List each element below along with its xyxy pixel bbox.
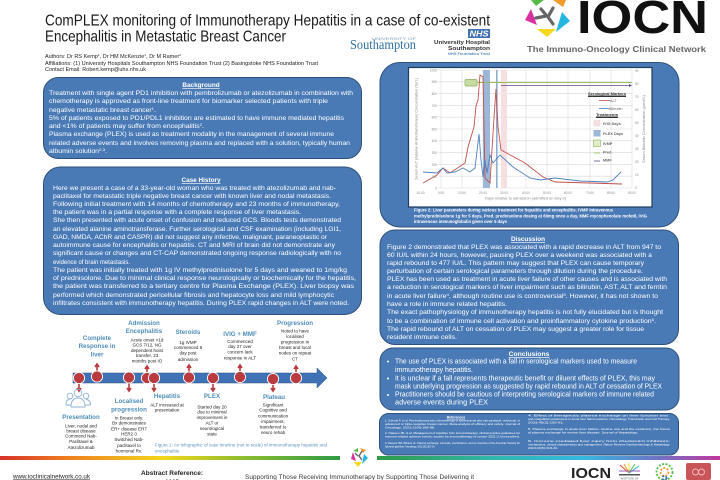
chart legend (588, 92, 626, 162)
footer: abstract reference (141, 470, 203, 480)
right axis labels: 80 (635, 82, 639, 86)
panel: background (44, 78, 362, 158)
footer logo: rainbow (619, 463, 640, 480)
chart legend: MMF (603, 158, 612, 162)
references right column: 6. Immune-mediated liver injury from checkpoint inhibitors: (528, 440, 671, 443)
event: localised progression: HER2 0 (121, 432, 137, 436)
references heading: References (447, 416, 465, 420)
x axis labels: 60.00 (564, 191, 572, 195)
event: localised progression: Bx demonstrates (112, 420, 147, 426)
event: steroids: commenced 8 (174, 345, 203, 350)
conclusions bullets (387, 358, 662, 406)
logo: University Hospital Southampton NHS (434, 29, 491, 56)
x axis labels: 40.00 (522, 191, 530, 195)
event: plateau: communication (258, 414, 289, 418)
discussion text: The rapid rebound of ALT on cessation of PLEX may suggest a greater role for tissue (387, 326, 644, 333)
event: IVIG and MMF: concern lack (227, 350, 253, 354)
references right column: 2023;20(5):319-34. (528, 447, 558, 450)
event: plateau: Plateau (263, 394, 285, 401)
discussion text: to be a combination of immune cell activation and proinflammatory cytokine production 6. (387, 316, 656, 325)
event: PLEX: PLEX (204, 393, 221, 400)
left axis title: Serum ALT (Alanine Aminotransferase) Concentration (IU/L) (414, 78, 418, 180)
left axis labels: 0 (435, 186, 437, 190)
event: hepatitis: presentation (155, 408, 180, 412)
background text: 5% of patients exposed to PD1/PDL1 inhibition are estimated to have immune mediated hepatitis (49, 115, 344, 122)
x axis labels: -10.00 (415, 191, 425, 195)
event: hepatitis: ALT increased at (150, 402, 185, 408)
panel: references (380, 414, 678, 455)
event: plateau: Significant (263, 402, 284, 408)
event: hepatitis: Hepatitis (154, 393, 181, 400)
logo: University of Southampton: Southampton (350, 37, 416, 52)
event: progression: progression in (281, 340, 310, 344)
references left column: Oncology. 2023;12(4):188-98. (385, 426, 435, 430)
left axis labels: 300 (432, 151, 437, 155)
event: admission encephalitis: Admission (128, 320, 160, 327)
background text: Plasma exchange (PLEX) is used as treatment modality in the management of several immune (49, 131, 334, 138)
panel: discussion (380, 230, 678, 344)
left axis labels: 700 (432, 104, 437, 108)
chart legend: Treatments (596, 113, 618, 117)
event: presentation: Paclitaxel & (69, 439, 93, 444)
case history text: GAD, NMDA, AChR and CASPR) did not suggest any infective, malignant, paraneoplastic or (53, 234, 328, 241)
event: complete response: liver (91, 352, 104, 358)
event: progression: breast and local (279, 345, 311, 350)
figure 2 caption (414, 208, 648, 224)
footer: abstract reference: Abstract Reference: (141, 470, 203, 477)
event: presentation: Presentation (62, 414, 100, 421)
references left column: 1. Schmid P, et al. Pembrolizumab plus chemotherapy or atezolizumab plus nab-paclitaxel, nivolumab, in (385, 420, 521, 422)
chart legend: ALT (610, 99, 617, 103)
event: progression: Progression (277, 320, 313, 327)
event: progression: CT (292, 356, 298, 362)
right axis title: Serum Bilirubin Concentration (µmol/L) (642, 95, 646, 163)
references right column: and coagulation parameters in acute liver failure patients. Hematology, Transfusion and Cell Therapy. (528, 418, 670, 421)
chart legend: Bilirubin (609, 107, 623, 111)
background text: negative metastatic breast cancer 1. (49, 106, 156, 114)
x axis labels: 50.00 (543, 191, 551, 195)
event: admission encephalitis: GCS 7/12, NG (132, 342, 162, 348)
event: presentation (62, 414, 100, 450)
event: PLEX: state (207, 432, 217, 436)
panel: case history (44, 167, 362, 314)
discussion text: The exact pathophysiology of immunotherapy hepatitis is not fully elucidated but is thought (387, 309, 663, 316)
conclusions bullets: It is unclear if a fall represents therapeutic benefit or diluent effects of PLEX, this may (395, 376, 655, 382)
figure 1 caption: encephalitis (155, 448, 180, 454)
event: localised progression: Localised (115, 398, 143, 405)
authors and affiliations: Authors: Dr RS Kemp 1, Dr HM McKenzie 1, Dr M Ramer 2 (45, 53, 181, 60)
logo: University Hospital Southampton NHS: NHS (470, 30, 489, 38)
x axis labels: 10.00 (458, 191, 466, 195)
x axis labels: 70.00 (586, 191, 594, 195)
references left column: advanced or triple-negative breast cancer. Meta-analysis of efficacy and safety. Journal of (385, 423, 520, 426)
case history text: significant cause or changes and CT-CAP demonstrated ongoing response radiologically with no (53, 250, 341, 257)
right axis labels: 30 (635, 147, 639, 151)
right axis labels: 90 (635, 69, 639, 73)
references left column (385, 420, 521, 448)
event: plateau: transferred to (260, 424, 287, 430)
case history text: the patient was transferred to a tertiary centre for Plasma Exchange (PLEX). Liver biopsy was (53, 283, 354, 290)
case history text: of prednisolone. Due to minimal clinical response neurologically or biochemically for the hepatitis, (53, 275, 356, 282)
event: IVIG and MMF (223, 331, 257, 360)
event: presentation: Commend Nab- (65, 434, 97, 438)
case history text: an elevated alanine aminotransferase. Further serological and CSF examination (including LGI1, (53, 226, 341, 233)
event: progression: localised (286, 334, 304, 339)
event: localised progression (111, 398, 147, 454)
left axis labels: 600 (432, 116, 437, 120)
discussion text: in acute liver failure 4, although routine use is controversial 5. However, it has not shown to (387, 292, 658, 300)
case history text: Here we present a case of a 33-year-old woman who was treated with atezolizumab and nab- (53, 185, 336, 192)
logo tagline: The Immuno-Oncology Clinical Network (527, 44, 706, 54)
title: ComPLEX monitoring of Immunotherapy Hepatitis in a case of co-existent (45, 12, 490, 30)
event: PLEX: improvement in (197, 415, 228, 420)
event: localised progression: hormonal Rx. (116, 448, 142, 454)
logo: University Hospital Southampton NHS: NHS Foundation Trust (448, 52, 491, 56)
right axis labels: 0 (635, 186, 637, 190)
left axis labels: 100 (432, 175, 437, 179)
references left column: 2. Haanen JB, et al. Management of toxicities from immunotherapy: clinical practice guidelines for (385, 432, 520, 435)
event: IVIG and MMF: day 27 over (228, 344, 252, 349)
discussion heading: Discussion (511, 236, 545, 243)
background heading: Background (182, 82, 220, 89)
discussion text: PLEX has been used as treatment in acute liver failure of other causes and is associated with (387, 276, 667, 283)
references right column (528, 414, 671, 450)
right axis labels: 40 (635, 134, 639, 138)
figure 1 caption: Figure 1: An infographic of case timeline (not to scale) of immunotherapy hepatitis and (155, 442, 327, 448)
chart legend: Serological Markers (588, 92, 626, 96)
conclusions bullets: Practitioners should be cautious of interpreting serological markers of immune related (395, 392, 654, 398)
right axis labels: 20 (635, 160, 639, 164)
right axis labels: 70 (635, 95, 639, 99)
logo: University of Southampton: UNIVERSITY OF (372, 37, 416, 41)
event: localised progression: Switched Nab- (114, 437, 144, 442)
icon: people (66, 389, 90, 407)
case history heading: Case History (181, 177, 221, 184)
event: localised progression: ER+ disease ER7 (111, 426, 147, 432)
event: progression (277, 320, 313, 362)
authors and affiliations: Affiliations: (1) University Hospitals Southampton NHS Foundation Trust (2) Basingstoke NHS Foundation Trust (45, 61, 319, 67)
event: IVIG and MMF: IVIG + MMF (223, 331, 257, 338)
chart legend: IVMP (603, 142, 613, 146)
discussion text: rapid rebound to 477 IU/L. This pattern may suggest that PLEX can cause temporary (387, 260, 645, 267)
event: PLEX: ALT or (205, 420, 219, 426)
event: hepatitis (150, 393, 185, 412)
event: progression: Noted to have (281, 328, 310, 334)
event: presentation: Atezolizumab (67, 445, 95, 450)
figure 2 caption: Figure 2: Liver parameters during various treatment for hepatitis and encephalitis. IVMP intravenous (414, 208, 614, 212)
event: PLEX: Started day 20 (197, 404, 227, 410)
left axis labels: 400 (432, 139, 437, 143)
event: complete response: Response in (79, 343, 116, 350)
references left column: 3. Reeves HM, Winters JL. Plasma exchange: concepts, mechanisms, and an overview of the American Society for (385, 442, 520, 445)
event: plateau (258, 394, 289, 435)
event: steroids: admission (178, 357, 199, 362)
figure 1 caption (155, 442, 327, 454)
event: IVIG and MMF: Commenced (227, 339, 253, 344)
event: admission encephalitis: transfer, 23 (136, 353, 159, 358)
event: plateau: Cognitive and (259, 408, 287, 412)
logo: University Hospital Southampton NHS: Southampton (448, 46, 490, 52)
right axis labels (635, 69, 639, 190)
references left column: immune-related adverse events: society for immunotherapy of cancer 2021 (J Immunother). (385, 436, 520, 438)
logo: University Hospital Southampton NHS: University Hospital (434, 40, 491, 46)
background text: and <1% of patients may suffer from encephalitis 2. (49, 122, 204, 130)
panel: figure 2 (380, 62, 679, 227)
left axis labels: 200 (432, 163, 437, 167)
event: plateau: impairment, (261, 419, 285, 424)
title (45, 12, 490, 46)
event: presentation: Liver, nodal and (65, 424, 97, 428)
panel: conclusions (380, 348, 679, 410)
references left column: Apheresis guidelines. Hematology. 2012;2012:617-24. (385, 446, 435, 448)
event: admission encephalitis: Acute onset <1d (131, 338, 164, 342)
x axis labels: 20.00 (479, 191, 487, 195)
case history text: autoimmune cause for encephalitis or hepatitis. CT and MRI of brain did not demonstrate any (53, 242, 336, 249)
footer logo: ring of dots (656, 464, 672, 480)
left axis labels: 800 (432, 92, 437, 96)
case history text: She then presented with acute onset of confusion and reduced GCS. Bloods tests demonstrated (53, 217, 341, 224)
discussion text (387, 244, 667, 341)
chart legend: PLEX Days (603, 132, 623, 136)
x axis labels: 90.00 (628, 191, 636, 195)
case history text: evidence of brain metastasis. (53, 259, 130, 266)
case history text: the patient was in a partial response with a complete response of liver metastasis. (53, 209, 301, 216)
references right column: 5. Plasma exchange in acute liver failure: routine use and the evidence, the future (528, 428, 671, 431)
references right column: 4. Effect of therapeutic plasma exchange on liver function test (528, 414, 669, 418)
conclusions bullets: adverse events during PLEX (395, 400, 488, 406)
background text: albumin solution 2,3. (49, 146, 107, 155)
authors and affiliations: Contact Email: Robert.kemp@uhs.nhs.uk (45, 67, 147, 73)
case history text (53, 185, 356, 307)
x axis labels: 30.00 (500, 191, 508, 195)
logo: IOCN star (525, 0, 570, 37)
event: admission encephalitis (126, 320, 164, 364)
right axis labels: 50 (635, 121, 639, 125)
background text: Treatment with single agent PD1 inhibition with pembrolizumab or atezolizumab in combination with (49, 90, 353, 97)
timeline infographic (62, 320, 327, 454)
discussion text: perturbation of certain serological parameters through dilution during the procedure. (387, 268, 643, 275)
x axis labels (415, 191, 636, 195)
event: steroids: Steroids (176, 329, 201, 336)
background text (49, 90, 353, 155)
title: Encephalitis in Metastatic Breast Cancer (45, 28, 287, 46)
event: steroids: day post (179, 350, 197, 356)
event: PLEX: due to minimal (197, 410, 227, 414)
conclusions bullets: immunotherapy hepatitis. (395, 367, 473, 374)
event: steroids (174, 329, 203, 362)
references right column: 2023;45(2):155-61. (528, 422, 564, 424)
event: IVIG and MMF: response in ALT (224, 356, 256, 360)
background text: chemotherapy is approved as front-line treatment for biomarker selected patients with triple (49, 98, 328, 105)
event: PLEX (197, 393, 228, 436)
conclusions bullets: mask underlying progression as suggested by rapid rebound in ALT of cessation of PLEX (395, 384, 662, 390)
right axis labels: 10 (635, 173, 639, 177)
discussion text: Figure 2 demonstrated that PLEX was associated with a rapid decrease in ALT from 947 to (387, 244, 661, 251)
case history text: Following initial treatment with 14 months of chemotherapy and 23 months of immunotherapy, (53, 201, 340, 208)
event: PLEX: neurological (200, 426, 224, 431)
figure 2 caption: methylprednisolone 1g for 5 days, Pred. prednisolone dosing at 60mg once a day, MMF mycophenolate mofetil, IVIG (414, 214, 648, 218)
authors and affiliations (45, 53, 319, 73)
event: complete response (79, 335, 116, 358)
event: localised progression: progression (111, 406, 147, 414)
case history text: The patient was initially treated with 1g IV methylprednisolone for 5 days and weaned to 1mg/kg (53, 267, 347, 274)
event: plateau: neuro rehab (261, 430, 286, 435)
footer logo: red badge (686, 463, 711, 480)
chart legend: Pred. (603, 150, 612, 154)
left axis labels: 900 (432, 80, 437, 84)
case history text: performed which demonstrated pericellular fibrosis and hepatocyte loss and mild lymphocytic (53, 292, 335, 299)
background text: related adverse events and involves removing plasma and replaced with a solution, typically human (49, 140, 350, 147)
discussion text: a reduction in serological markers of liver impairment such as bilirubin, AST, ALT and ferritin (387, 284, 667, 291)
event: admission encephalitis: months post IO (132, 358, 163, 364)
references right column: of plasma exchange for severe liver disease. Journal of Hepatology. (528, 432, 638, 434)
event: localised progression: In Breast only, (115, 416, 143, 420)
event: steroids: 1g IVMP (179, 340, 197, 345)
event: progression: nodes on repeat (279, 350, 312, 356)
discussion text: have a role in immune related hepatitis. (387, 301, 507, 308)
gradient footer bar (0, 456, 720, 460)
event: admission encephalitis: Encephalitis (126, 328, 163, 335)
event: complete response: Complete (83, 335, 112, 342)
figure 2 caption: intravenous immunoglobulin given over 5 days (414, 219, 508, 224)
right axis labels: 60 (635, 108, 639, 112)
case history text: paclitaxel for metastatic triple negative breast cancer with known liver and nodal metastasis. (53, 193, 331, 200)
references right column: mechanisms, clinical characteristics and management. Nature Reviews Gastroenterology & Hepatology. (528, 444, 670, 446)
discussion text: resident immune cells. (387, 334, 457, 341)
chart: liver parameters over time (408, 68, 652, 207)
icon: small IOCN star (351, 448, 368, 467)
left axis labels: 500 (432, 128, 437, 132)
left axis labels: 1000 (430, 68, 437, 72)
x axis labels: 0.00 (438, 191, 444, 195)
case history text: infiltrates consistent with immunotherapy hepatitis. During PLEX rapid changes in ALT were noted. (53, 300, 349, 307)
event: localised progression: paclitaxel to (117, 443, 141, 448)
x axis title: Days relative to admission (admitted on Day 0) (485, 196, 566, 200)
timeline markers (73, 364, 302, 391)
chart legend: IVIG Days (603, 122, 621, 126)
conclusions bullets: The use of PLEX is associated with a fall in serological markers used to measure (395, 358, 637, 366)
conclusions heading: Conclusions (509, 351, 550, 358)
timeline arrow (73, 368, 327, 388)
event: presentation: breast disease (66, 428, 96, 434)
event: admission encephalitis: dependent hoist (131, 348, 164, 353)
left axis labels (430, 68, 437, 190)
x axis labels: 80.00 (607, 191, 615, 195)
discussion text: 60 IU/L within 24 hours, however, pausing PLEX over a weekend was associated with a (387, 252, 652, 259)
